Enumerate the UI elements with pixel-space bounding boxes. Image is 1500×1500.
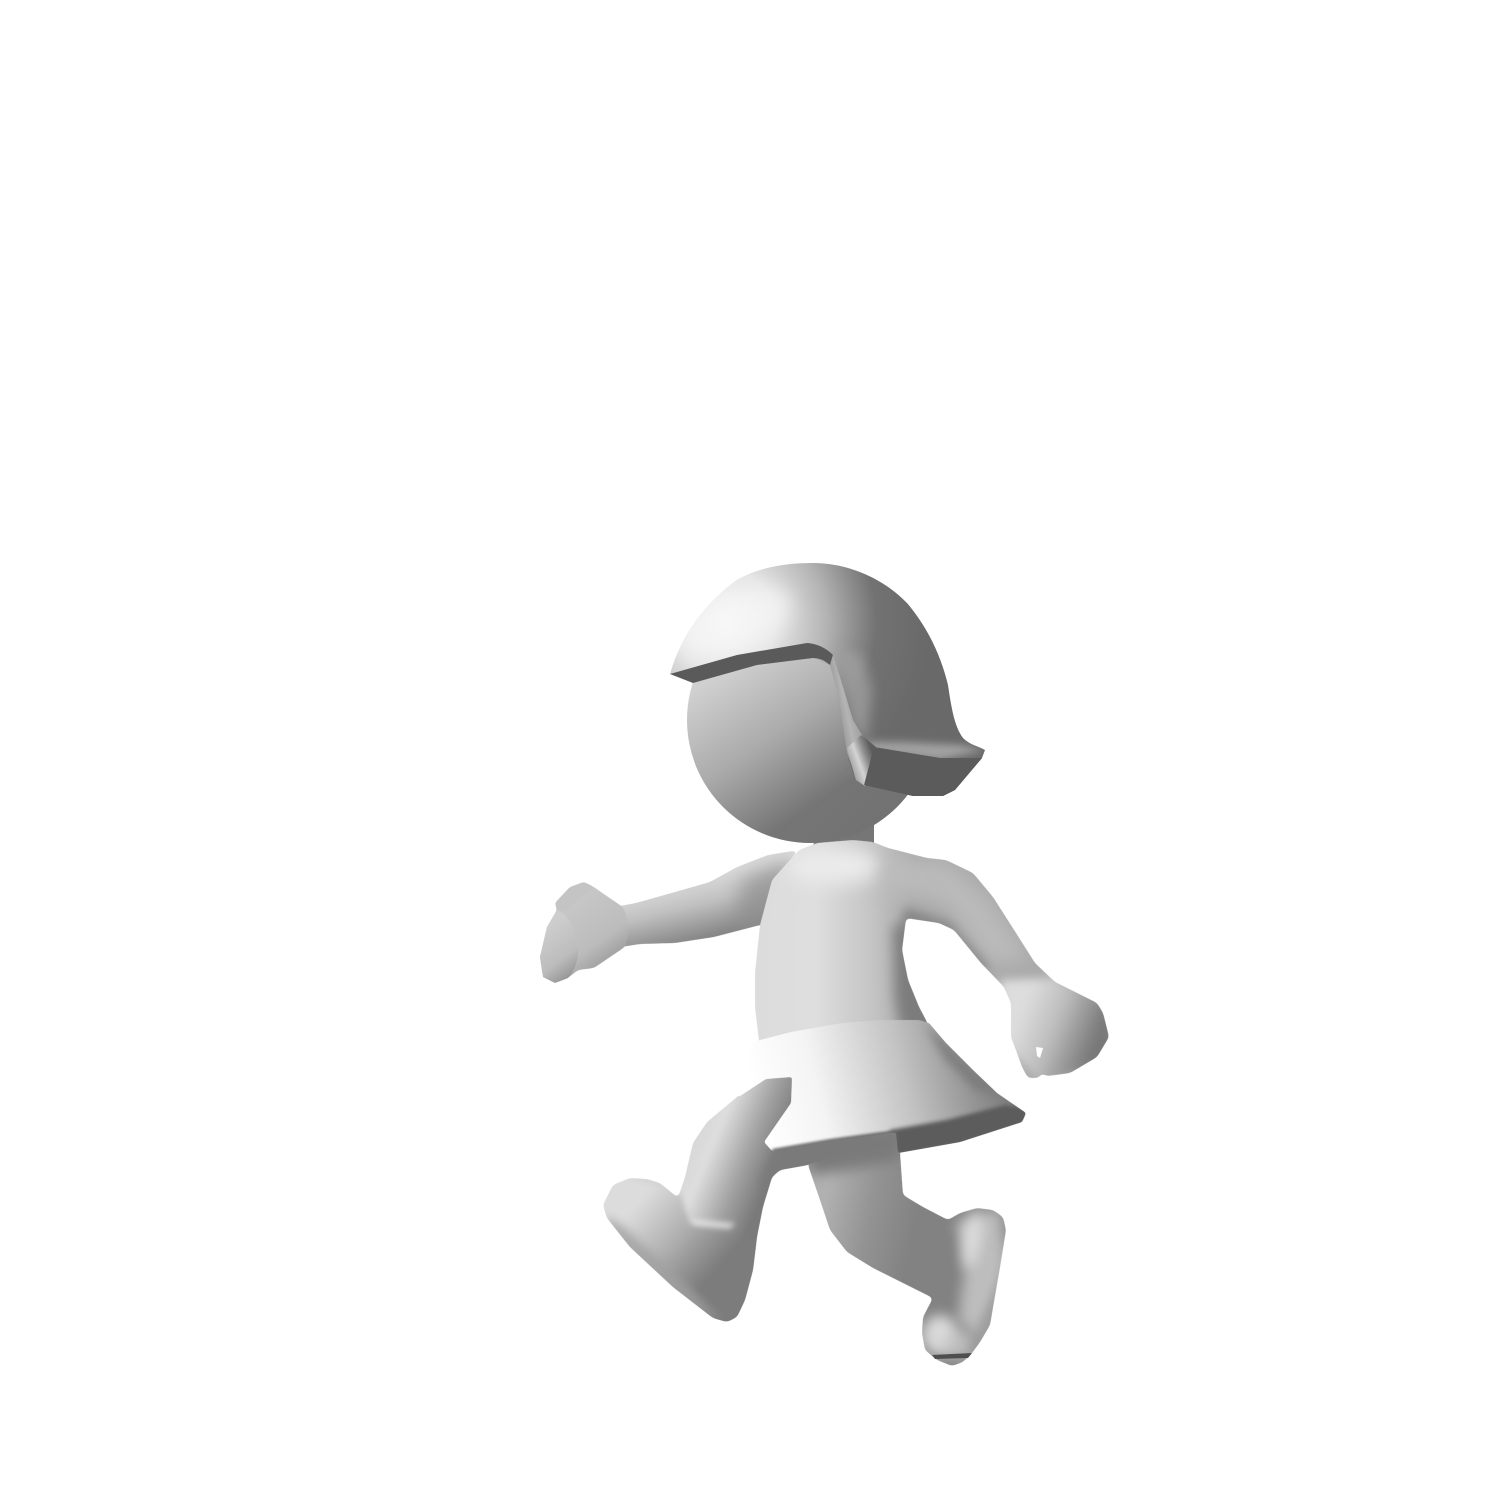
skirt hem — [770, 1130, 895, 1151]
left forearm — [615, 850, 799, 948]
torso and right arm — [755, 840, 1112, 1082]
neck — [800, 815, 888, 862]
left thumb — [555, 882, 594, 912]
hair fringe underside — [670, 643, 833, 683]
shoulder highlight — [785, 848, 885, 884]
skirt underside — [888, 1104, 1026, 1153]
illustration: 3D running figure — [540, 563, 1108, 1366]
back leg shape — [808, 1132, 1006, 1366]
head sphere — [687, 658, 908, 843]
left hand large finger — [540, 910, 578, 983]
right arm light — [880, 852, 1030, 965]
underarm shadow — [900, 908, 990, 975]
sole line — [932, 1353, 972, 1359]
figure — [540, 555, 1112, 1372]
skirt — [737, 1020, 1030, 1160]
front leg and foot — [604, 1077, 816, 1322]
hair outer surface — [670, 563, 985, 796]
fist gap — [1036, 1047, 1043, 1058]
hair lower rim — [864, 747, 982, 796]
hair lower corner — [847, 735, 876, 786]
hair side wall — [830, 655, 867, 778]
left arm and open hand — [540, 850, 799, 983]
left hand palm — [540, 882, 628, 983]
back leg and foot — [808, 1132, 1006, 1366]
hair helmet — [670, 563, 985, 796]
fist shading — [1000, 978, 1112, 1082]
torso side shadow — [886, 920, 927, 1022]
